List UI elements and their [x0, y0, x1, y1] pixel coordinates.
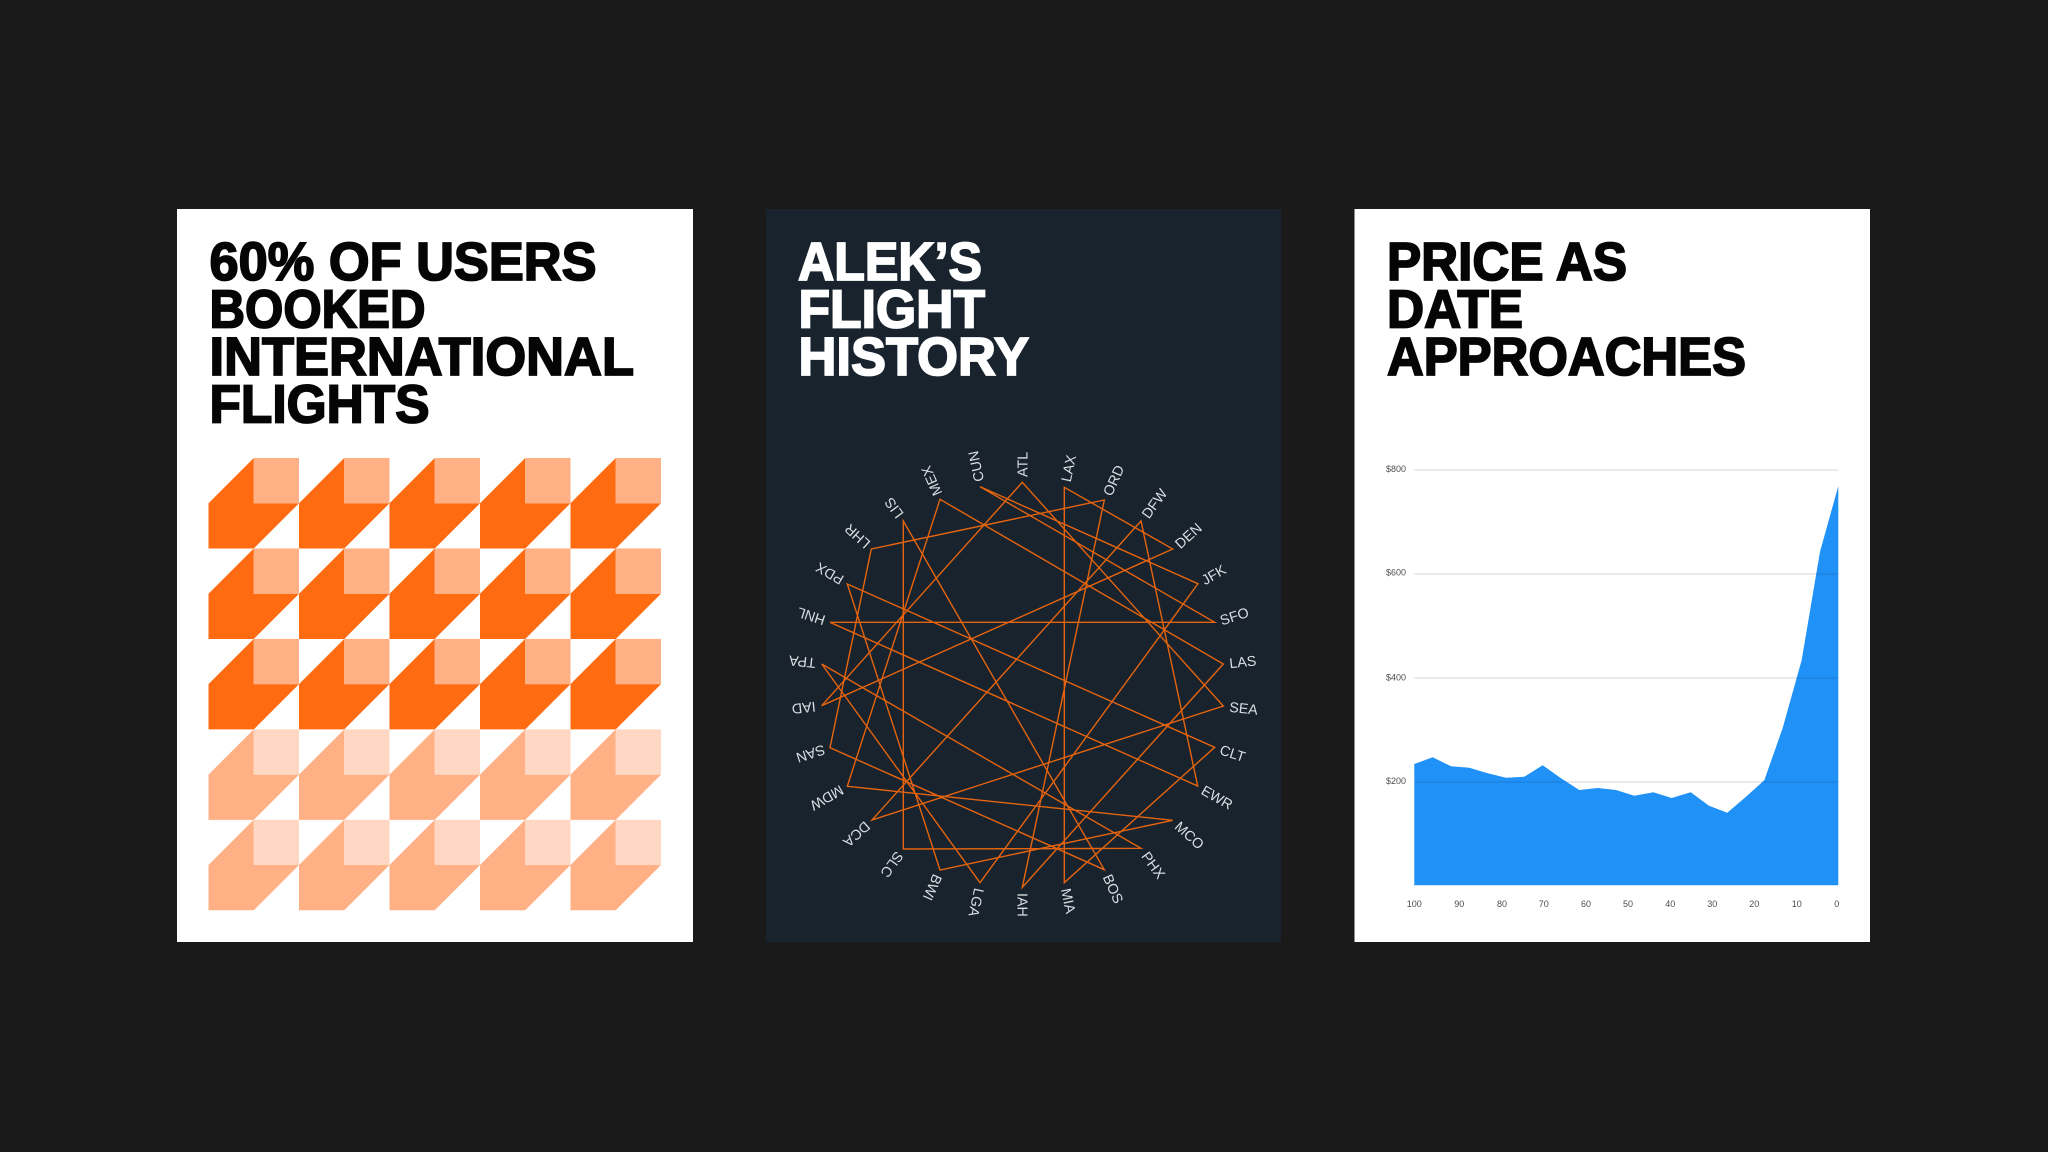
panel background	[177, 209, 693, 942]
airport labels around the circle: PDX	[813, 558, 847, 587]
x axis labels: 60	[1581, 899, 1591, 909]
x axis labels: 20	[1749, 899, 1759, 909]
airport labels around the circle: BOS	[1099, 872, 1126, 906]
title: price as date approaches: PRICE AS	[1387, 233, 1627, 292]
title: 60% of users booked international flights: BOOKED	[210, 280, 426, 340]
airport labels around the circle: ORD	[1101, 463, 1128, 499]
title: 60% of users booked international flights: FLIGHTS	[210, 376, 430, 435]
y axis labels: $200	[1386, 776, 1406, 786]
title: 60% of users booked international flights: 60% OF USERS	[210, 233, 596, 292]
airport labels around the circle: TPA	[788, 651, 817, 670]
title: 60% of users booked international flights: INTERNATIONAL	[210, 328, 634, 387]
y axis gridlines	[1414, 470, 1838, 782]
title: Alek's flight history	[798, 233, 1029, 387]
y axis labels: $600	[1386, 568, 1406, 578]
x axis labels: 50	[1623, 899, 1633, 909]
x axis labels: 10	[1792, 899, 1802, 909]
x axis labels: 0	[1834, 899, 1839, 909]
airport labels around the circle: CLT	[1218, 743, 1247, 766]
title: price as date approaches: DATE	[1387, 280, 1523, 340]
title: price as date approaches	[1387, 233, 1746, 387]
y axis labels: $400	[1386, 673, 1406, 683]
airport labels around the circle: SFO	[1218, 605, 1251, 629]
airport labels around the circle: LHR	[842, 520, 874, 551]
x axis labels: 70	[1539, 899, 1549, 909]
area chart: price by days before departure	[1386, 464, 1839, 909]
airport labels around the circle: DFW	[1139, 486, 1171, 522]
airport labels around the circle: LIS	[882, 494, 908, 521]
airport labels around the circle: HNL	[795, 603, 827, 627]
y axis labels: $800	[1386, 464, 1406, 474]
airport labels around the circle: DEN	[1172, 520, 1206, 553]
airport labels around the circle: IAH	[1013, 893, 1029, 917]
airport labels around the circle: BWI	[919, 871, 944, 903]
panel background	[766, 209, 1281, 942]
airport labels around the circle: LAS	[1229, 653, 1257, 672]
airport labels around the circle: JFK	[1199, 562, 1230, 589]
pictogram: booked share in dark orange, 3 of 5 rows	[208, 458, 661, 910]
area: price curve	[1414, 486, 1838, 885]
airport labels around the circle: SEA	[1228, 700, 1259, 719]
title: price as date approaches: APPROACHES	[1387, 328, 1746, 387]
x axis labels	[1407, 899, 1839, 909]
title: 60% of users booked international flights	[210, 233, 634, 435]
airport labels around the circle: MDW	[806, 781, 846, 813]
panel: international flights	[177, 209, 693, 942]
airport labels around the circle: MIA	[1057, 887, 1078, 916]
airport labels around the circle: CUN	[966, 449, 988, 483]
title: Alek's flight history: HISTORY	[798, 328, 1029, 387]
panel: Alek's flight history	[766, 209, 1281, 942]
airport labels around the circle: LAX	[1059, 453, 1080, 483]
panel: price as date approaches	[1354, 209, 1870, 942]
airport labels around the circle: SAN	[794, 741, 827, 765]
x axis labels: 100	[1407, 899, 1422, 909]
airport labels around the circle: IAD	[791, 698, 816, 716]
airport labels around the circle: LGA	[964, 887, 986, 918]
title: Alek's flight history: ALEK’S	[798, 233, 982, 292]
panel background	[1354, 209, 1870, 942]
airport labels around the circle	[788, 449, 1259, 918]
chord chart: route lines between airports	[822, 482, 1223, 887]
airport labels around the circle: EWR	[1198, 783, 1235, 813]
airport labels around the circle: MEX	[919, 463, 946, 498]
airport labels around the circle: MCO	[1171, 819, 1207, 853]
x axis labels: 30	[1707, 899, 1717, 909]
x axis labels: 40	[1665, 899, 1675, 909]
airport labels around the circle: DCA	[839, 817, 873, 850]
x axis labels: 80	[1497, 899, 1507, 909]
airport labels around the circle: ATL	[1016, 452, 1032, 477]
title: Alek's flight history: FLIGHT	[798, 280, 985, 340]
airport labels around the circle: SLC	[877, 848, 906, 880]
airport labels around the circle: PHX	[1137, 849, 1168, 883]
x axis labels: 90	[1454, 899, 1464, 909]
y axis labels	[1386, 464, 1406, 786]
